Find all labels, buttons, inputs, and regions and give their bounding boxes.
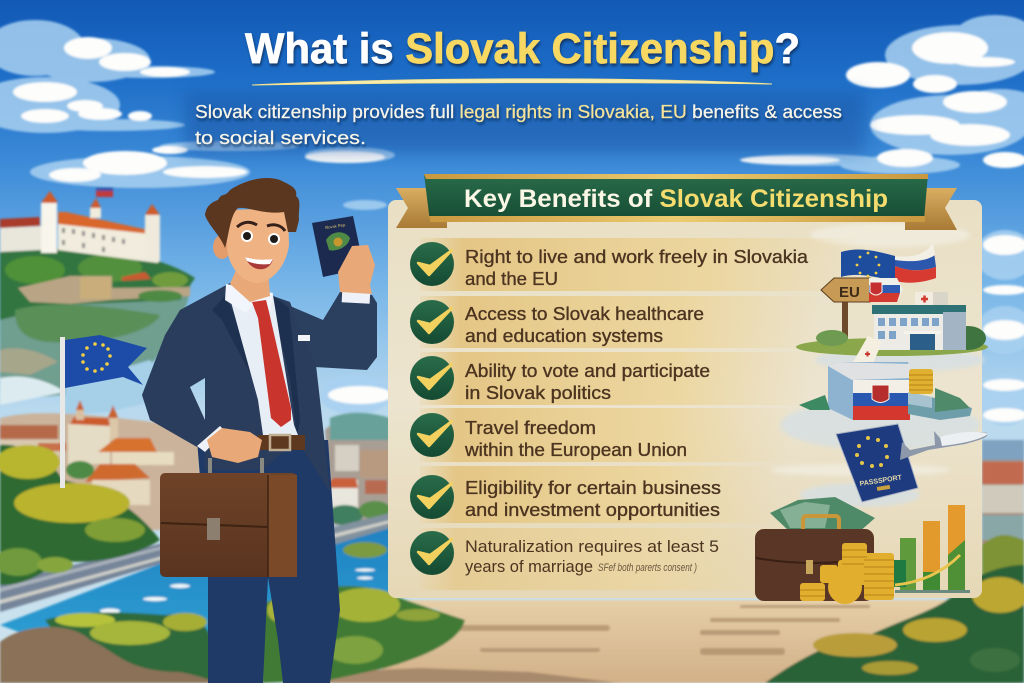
benefit 4 (410, 413, 687, 460)
neck (230, 270, 270, 302)
benefit text: Naturalization requires at least 5 (465, 537, 719, 556)
icon: hospital (796, 292, 988, 356)
subtitle: to social services. (195, 127, 366, 148)
icon: EU and Slovak flags with signpost: EU (839, 284, 860, 301)
foreground rocks (0, 627, 220, 683)
benefit text: and education systems (465, 326, 663, 346)
lapels (212, 296, 263, 398)
tie (252, 300, 291, 427)
ground path (300, 600, 1024, 683)
hair (205, 178, 299, 248)
banner ribbon tails (396, 188, 957, 230)
face (227, 208, 289, 283)
title: What is Slovak Citizenship? (245, 25, 800, 73)
belt (258, 435, 305, 450)
castle building (0, 188, 160, 263)
benefit 6 (410, 531, 719, 576)
shirt cuff left (197, 426, 225, 452)
subtitle (195, 101, 842, 148)
icon: check (410, 300, 454, 344)
icon: check (410, 242, 454, 286)
benefit text: Travel freedom (465, 418, 596, 438)
icon: check (410, 356, 454, 400)
benefit text: Right to live and work freely in Slovakia (465, 247, 809, 267)
right hand (338, 245, 375, 294)
road and bridge (0, 543, 163, 612)
panel: key benefits (388, 174, 988, 604)
collar (225, 284, 273, 313)
benefit 3 (410, 356, 710, 403)
icon: EU and Slovak flags with signpost (821, 243, 936, 352)
right side town and trees (982, 440, 1024, 600)
right arm sleeve (283, 292, 377, 370)
icon: EU flag on pole (60, 335, 147, 488)
jacket torso (142, 283, 330, 492)
panel background (388, 200, 982, 598)
benefit text: and investment opportunities (465, 500, 720, 520)
benefit 1 (410, 242, 809, 289)
benefit text: within the European Union (464, 440, 687, 460)
background: title shade band (185, 93, 865, 153)
panel cloud texture (770, 223, 985, 507)
trousers (197, 440, 340, 683)
passport in hand: Slovak Rep. (324, 222, 347, 230)
icon: check (410, 413, 454, 457)
distant town (0, 400, 391, 530)
benefit text: Eligibility for certain business (465, 478, 721, 498)
pocket square (298, 335, 310, 341)
benefit 5 (410, 475, 721, 520)
benefit text: in Slovak politics (465, 383, 611, 403)
passport in hand (312, 216, 364, 277)
icon: passport and plane (836, 424, 988, 502)
benefit 2 (410, 300, 704, 346)
man in suit (142, 178, 377, 683)
smile (245, 257, 273, 269)
left hand (207, 428, 262, 463)
background: clouds (0, 15, 1024, 426)
banner heading: Key Benefits of Slovak Citizenship (464, 185, 888, 213)
title underline (252, 79, 772, 85)
benefit rows (420, 238, 860, 590)
briefcase (160, 458, 297, 577)
hill with castle (0, 188, 195, 415)
benefit text: and the EU (465, 269, 558, 289)
subtitle: Slovak citizenship provides full legal rights in Slovakia, EU benefits & access (195, 101, 842, 122)
banner (424, 174, 928, 222)
shirt (226, 284, 298, 435)
benefit text: Access to Slovak healthcare (465, 304, 704, 324)
benefit text: Ability to vote and participate (465, 361, 710, 381)
benefit text: SFef both parerts consent ) (598, 562, 697, 574)
icon: check (410, 475, 454, 519)
icon: briefcase, coins and growth chart (755, 497, 970, 604)
icon: check (410, 531, 454, 575)
background: scene (0, 188, 1024, 683)
icon: ballot box with money (799, 336, 972, 420)
icon: passport and plane: PASSSPORT (859, 474, 903, 488)
eyes (237, 222, 285, 245)
left trees (0, 445, 160, 585)
river (0, 528, 390, 640)
ear (213, 235, 231, 259)
foreground bushes (45, 565, 1024, 683)
shirt cuff right (342, 289, 370, 304)
benefit text: years of marriage (465, 557, 593, 576)
